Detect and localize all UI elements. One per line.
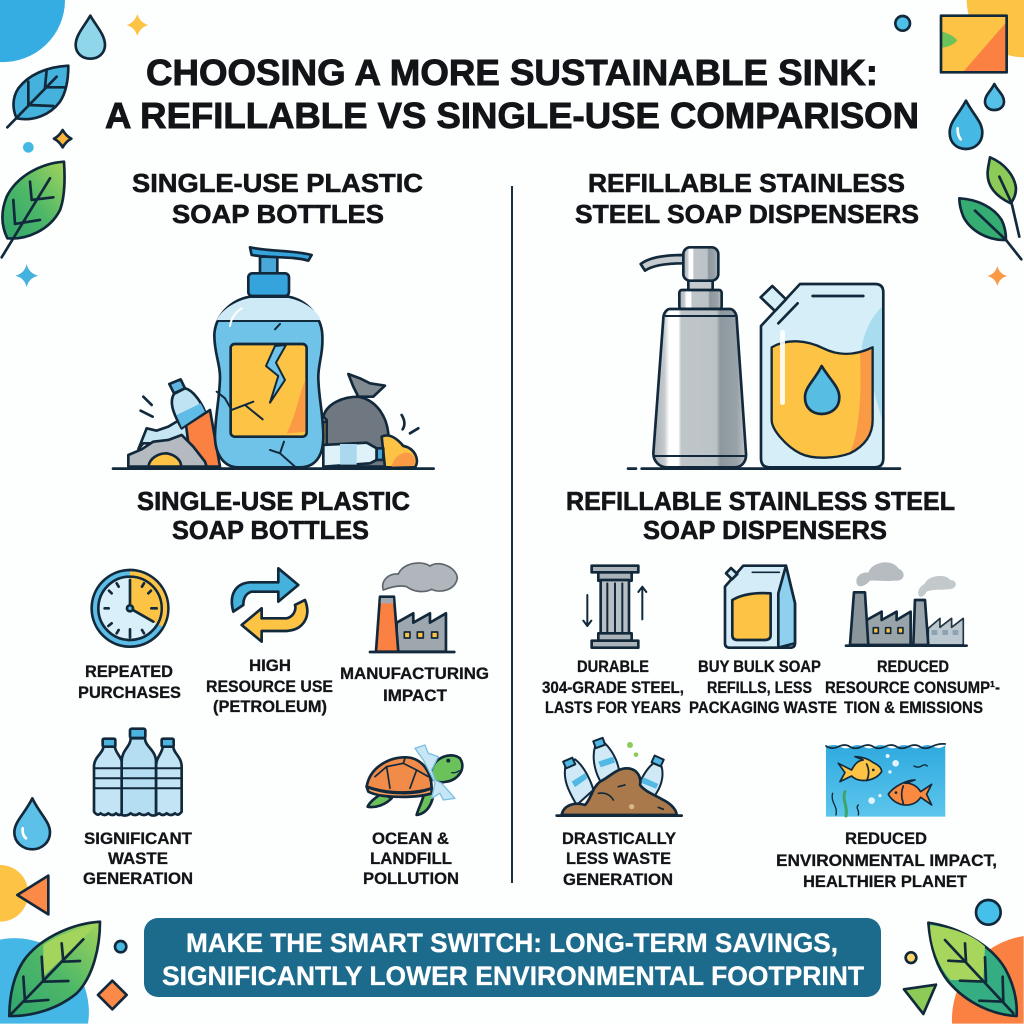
ground line	[628, 465, 900, 473]
section heading: single-use: SINGLE-USE PLASTIC	[137, 486, 410, 516]
icon: healthy ocean with fish	[826, 743, 945, 817]
illustration: cracked plastic bottle and trash	[112, 247, 435, 470]
title: CHOOSING A MORE SUSTAINABLE SINK:	[146, 52, 878, 93]
text block: repeated purchases: PURCHASES	[78, 683, 181, 702]
text block: ocean and landfill pollution: POLLUTION	[363, 869, 459, 888]
text block: less waste	[562, 829, 677, 889]
text block: bulk refills	[689, 657, 837, 717]
icon: reduced emission factories	[846, 562, 967, 646]
section heading: single-use	[137, 486, 410, 545]
text block: healthier planet: HEALTHIER PLANET	[803, 872, 968, 891]
text block: ocean and landfill pollution: LANDFILL	[370, 849, 452, 868]
text block: less waste: LESS WASTE	[566, 849, 671, 868]
text block: ocean and landfill pollution	[363, 829, 459, 888]
panel: refillable benefits icons	[557, 562, 967, 817]
text block: durable steel: LASTS FOR YEARS	[545, 698, 681, 717]
icon: blue dot	[976, 900, 1001, 925]
steel dispenser	[641, 247, 746, 467]
panel heading: single-use: SINGLE-USE PLASTIC	[132, 168, 423, 198]
icon: steel column with arrows	[583, 566, 646, 648]
text block: repeated purchases: REPEATED	[85, 662, 173, 681]
icon: ring dot	[115, 941, 126, 952]
panel heading: refillable	[575, 168, 919, 229]
text block: durable steel: 304-GRADE STEEL,	[542, 678, 684, 697]
text block: durable steel	[542, 657, 684, 717]
title	[105, 52, 919, 136]
icon: orange diamond	[98, 981, 127, 1009]
section heading: refillable	[566, 486, 955, 545]
panel: single-use drawbacks icons	[92, 563, 462, 816]
discarded bottle	[169, 379, 205, 428]
fish	[838, 757, 882, 782]
section heading: refillable: REFILLABLE STAINLESS STEEL	[566, 486, 955, 516]
pump	[248, 247, 312, 296]
icon: polluting factory	[370, 563, 457, 652]
icon: coloured square	[941, 16, 1007, 72]
icon: water drop	[76, 16, 105, 59]
text block: less waste: DRASTICALLY	[562, 829, 677, 848]
text block: repeated purchases	[78, 662, 181, 702]
icon: twin leaves	[959, 157, 1021, 259]
icon: green triangle	[904, 985, 936, 1014]
call to action banner: MAKE THE SMART SWITCH: LONG-TERM SAVINGS,	[186, 928, 838, 958]
icon: blue sparkle	[15, 264, 38, 287]
text block: high resource use: (PETROLEUM)	[213, 697, 327, 716]
panel heading: refillable: STEEL SOAP DISPENSERS	[575, 199, 919, 229]
plastic ribbon bow	[415, 745, 455, 800]
icon: bulk refill pouch	[725, 566, 795, 648]
text block: significant waste generation: WASTE	[108, 849, 168, 868]
bottom-left decorations	[0, 798, 127, 1024]
soap drop	[805, 366, 839, 414]
icon: clock	[92, 570, 168, 647]
icon: orange triangle	[17, 876, 48, 914]
cracked label	[217, 324, 307, 467]
text block: reduced resource consumption: RESOURCE CONSUMP¹-	[825, 678, 1000, 697]
panel heading: refillable: REFILLABLE STAINLESS	[588, 168, 905, 198]
text block: significant waste generation: SIGNIFICANT	[84, 829, 193, 848]
icon: bottles in soil mound	[557, 738, 682, 816]
text block: manufacturing impact: IMPACT	[383, 686, 448, 705]
text block: bulk refills: BUY BULK SOAP	[698, 657, 821, 676]
panel heading: single-use: SOAP BOTTLES	[172, 199, 384, 229]
icon: drop	[14, 798, 50, 849]
icon: orange sparkle	[987, 266, 1007, 286]
icon: leaf	[9, 922, 100, 1016]
icon: sea turtle with plastic	[367, 745, 462, 815]
title: A REFILLABLE VS SINGLE-USE COMPARISON	[105, 95, 919, 136]
text block: healthier planet	[776, 829, 997, 891]
icon: blue dot	[895, 16, 910, 31]
icon: diamond	[54, 130, 71, 147]
icon: blue leaf	[7, 66, 68, 127]
text block: high resource use: RESOURCE USE	[206, 677, 333, 696]
section heading: single-use: SOAP BOTTLES	[172, 515, 369, 545]
text block: high resource use	[206, 656, 333, 716]
ground line	[112, 467, 435, 470]
text block: manufacturing impact: MANUFACTURING	[340, 664, 489, 683]
icon: three plastic bottles	[94, 729, 182, 816]
section heading: refillable: SOAP DISPENSERS	[643, 515, 887, 545]
top-right decorations	[895, 0, 1024, 286]
bottom-right decorations	[904, 900, 1024, 1024]
text block: reduced resource consumption	[825, 657, 1000, 717]
icon: sparkle	[127, 14, 148, 36]
text block: high resource use: HIGH	[249, 656, 291, 675]
icon: big drop	[950, 101, 982, 149]
text block: bulk refills: REFILLS, LESS	[707, 678, 812, 697]
icon: yellow dot	[906, 952, 916, 963]
icon: small drop	[985, 84, 1004, 110]
icon: exchange arrows	[232, 568, 307, 642]
bottle body	[214, 297, 323, 467]
text block: significant waste generation	[83, 829, 193, 888]
refill pouch	[761, 284, 883, 467]
text block: significant waste generation: GENERATION	[83, 869, 193, 888]
centre divider	[511, 186, 513, 883]
text block: durable steel: DURABLE	[577, 657, 649, 676]
trash bag	[323, 374, 418, 467]
fish	[888, 780, 932, 805]
illustration: steel dispenser and refill pouch	[628, 247, 900, 469]
top-left decorations	[0, 0, 148, 287]
text block: bulk refills: PACKAGING WASTE	[689, 698, 837, 717]
text block: healthier planet: REDUCED	[845, 829, 927, 848]
lying bottle	[323, 443, 383, 467]
icon: green leaf	[2, 162, 65, 257]
text block: reduced resource consumption: REDUCED	[877, 657, 949, 676]
text block: ocean and landfill pollution: OCEAN &	[372, 829, 449, 848]
panel heading: single-use	[132, 168, 423, 229]
text block: healthier planet: ENVIRONMENTAL IMPACT,	[776, 851, 997, 870]
text block: reduced resource consumption: TION & EMISSIONS	[844, 698, 983, 717]
call to action banner	[144, 918, 881, 997]
icon: leaf	[928, 923, 1017, 1016]
call to action banner: SIGNIFICANTLY LOWER ENVIRONMENTAL FOOTPRINT	[162, 961, 864, 991]
text block: less waste: GENERATION	[563, 870, 673, 889]
text block: manufacturing impact	[340, 664, 489, 705]
